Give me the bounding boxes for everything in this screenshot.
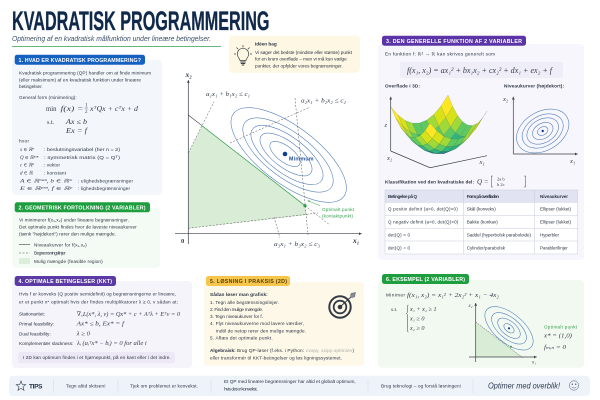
- kkt conditions: Komplementær slackness:: [19, 341, 73, 346]
- kkt conditions: Stationaritet:: [19, 312, 45, 317]
- tips bar: [9, 376, 590, 396]
- panel: 1 hvad er kvadratisk programmering: [12, 55, 162, 195]
- algebraic note: ): [352, 348, 354, 353]
- tip 3: hvis det er konvekst.: [224, 386, 258, 392]
- table: classification: Saddel (hyperbolsk paraboloide): [467, 233, 532, 238]
- mini chart: x₁: [531, 360, 536, 366]
- tip 3: [224, 379, 356, 392]
- text block 4: Hvis f er konveks (Q positiv semidefinit) og begrænsningerne er lineære,: [19, 292, 176, 297]
- axes: [175, 70, 362, 245]
- legend: Begrænsningslinjer: [34, 251, 66, 256]
- formula: general form: 1: [85, 104, 88, 108]
- axes: 0: [181, 238, 184, 245]
- definitions list: Q ∈ ℝⁿˣⁿ: [20, 155, 39, 161]
- formula box: f(x₁, x₂) = ax₁² + bx₁x₂ + cx₂² + dx₁ + ex₂ + f: [407, 66, 554, 75]
- panel: 4 optimale betingelser: [12, 276, 192, 368]
- icon: target with arrow: [329, 292, 356, 318]
- kkt conditions: [19, 311, 180, 347]
- optimal point: Optimalt punkt: [322, 207, 355, 212]
- chart: 3d surface: x₂: [386, 155, 393, 162]
- formula: general form: 2: [85, 110, 88, 115]
- constraint labels: a₁x₁ + b₁x₂ ≤ c₁: [206, 91, 250, 98]
- formula: general form: xᵀQx + cᵀx + d: [89, 106, 139, 113]
- table: classification: det(Q) = 0: [388, 245, 410, 250]
- steps: 5. Aflæs det optimale punkt.: [210, 335, 273, 340]
- icon: smiley: [569, 381, 579, 390]
- text block 2: Vi minimerer f(x₁,x₂) under lineære begrænsninger.: [19, 218, 129, 223]
- legend: Niveaukurver for f(x₁,x₂): [34, 242, 87, 247]
- formula box: [400, 62, 563, 78]
- tip 3: Et QP med lineære begrænsninger har altid et globalt optimum,: [224, 379, 356, 384]
- subtitle: Optimering af en kvadratisk målfunktion under lineære betingelser.: [12, 35, 211, 43]
- constraints: [391, 305, 437, 332]
- panel: 3 den generelle funktion: [378, 36, 584, 260]
- definitions list: E ∈ ℝᵖˣⁿ, f ∈ ℝᵖ: [18, 186, 73, 192]
- text block 4: er et punkt x* optimalt hvis der findes multiplikatorer λ ≥ 0, ν sådan at:: [19, 299, 178, 305]
- definitions list: hvor: [19, 139, 29, 144]
- heading 4: 4. OPTIMALE BETINGELSER (KKT): [18, 279, 112, 285]
- callout text: punkter, der opfylder vores begrænsninger.: [255, 63, 343, 68]
- chart: contour plot: [502, 96, 578, 165]
- callout text: Vi søger det bedste (mindste eller største) punkt: [255, 50, 353, 55]
- legend: Mulig mængde (feasible region): [34, 259, 103, 264]
- steps: 1. Tegn alle begrænsningslinjer.: [210, 300, 279, 305]
- axes: x₂: [184, 70, 192, 79]
- title: KVADRATISK PROGRAMMERING: [12, 6, 270, 36]
- constraint labels: [206, 91, 347, 248]
- icon: light bulb: [234, 45, 252, 65]
- definitions list: x ∈ ℝⁿ: [19, 147, 34, 153]
- classification heading: Q =: [477, 178, 489, 186]
- algebraic note: eller transformér til KKT-betingelser og løs ligningssystemet.: [210, 355, 342, 360]
- algebraic note: Brug QP-løser (f.eks. i Python:: [237, 348, 304, 353]
- tip 1: Tegn altid skitsen!: [66, 384, 106, 389]
- definitions list: : ulighedsbegrænsninger: [78, 178, 133, 183]
- table: classification: Betingelse på Q: [388, 193, 417, 199]
- table: classification: Ellipser (lukket): [540, 207, 572, 212]
- heading 6: 6. EKSEMPEL (2 VARIABLER): [386, 277, 465, 283]
- main chart: feasible region and level curves: [175, 70, 362, 248]
- result: Optimalt punkt: [544, 324, 578, 329]
- heading 5: 5. LØSNING I PRAKSIS (2D): [210, 279, 287, 285]
- kkt conditions: λᵢ (aᵢᵀx* − bᵢ) = 0 for alle i: [76, 340, 147, 347]
- panel: 5 løsning i praksis: [204, 276, 364, 366]
- table: classification: Q negativ definit (a<0, det(Q)>0): [388, 220, 459, 225]
- formula: general form: [46, 104, 139, 135]
- table: classification: Form på overfladen: [467, 193, 499, 199]
- note box: [18, 352, 175, 363]
- algebraic note: Algebraisk:: [210, 348, 236, 353]
- table: classification: det(Q) < 0: [388, 233, 410, 238]
- objective: Minimer: [386, 293, 405, 298]
- classification heading: b 2c: [497, 182, 505, 187]
- steps: indtil de netop rører den mulige mængde.: [216, 328, 306, 333]
- minimum point: Minimum: [289, 156, 314, 162]
- table: classification: Ellipser (lukket): [540, 220, 572, 225]
- tips label: TIPS: [29, 383, 43, 390]
- legend: [19, 242, 103, 264]
- intro text 3: En funktion f: ℝ² → ℝ kan skrives generelt som: [385, 52, 495, 57]
- objective: f(x₁, x₂) = x₁² + 2x₂² + x₁ − 4x₂: [407, 292, 500, 299]
- constraints: x₁ ≥ 0: [409, 316, 425, 322]
- steps: Sådan løser man grafisk:: [210, 291, 268, 297]
- steps: 2. Find den mulige mængde.: [210, 307, 263, 312]
- heading 2: 2. GEOMETRISK FORTOLKNING (2 VARIABLER): [18, 205, 146, 211]
- label: niveaukurver: Niveaukurver (højdekort):: [504, 84, 564, 89]
- feasible region: [188, 126, 307, 228]
- callout text: for en krum overflade – men vi må kun vælge: [255, 55, 347, 61]
- constraint lines: [188, 98, 329, 238]
- classification heading: 2a b: [497, 176, 505, 182]
- result: [543, 324, 578, 351]
- callout text: Idéen bag: [255, 41, 277, 46]
- chart: contour plot: x₂: [502, 96, 509, 103]
- tip 2: Tjek om problemet er konvekst.: [130, 384, 198, 389]
- kkt conditions: λ ≥ 0: [76, 332, 90, 338]
- note box: I 2D kan optimum findes i et hjørnepunkt, på en kant eller i det indre.: [23, 354, 171, 360]
- algebraic note: [210, 348, 354, 360]
- constraints: x₂ ≥ 0: [409, 325, 425, 332]
- heading 3: 3. DEN GENERELLE FUNKTION AF 2 VARIABLER: [386, 39, 522, 45]
- intro text: General form (minimering):: [19, 95, 77, 100]
- kkt conditions: Dual feasibility:: [19, 331, 51, 336]
- table: classification: Parabler/linjer: [540, 245, 568, 250]
- text block 2: [19, 218, 137, 237]
- formula: general form: s.t.: [47, 120, 55, 126]
- closing phrase: Optimer med overblik!: [488, 382, 561, 390]
- definitions list: : symmetrisk matrix (Q = Qᵀ): [44, 155, 121, 160]
- table: classification: Hyperbler: [540, 233, 560, 238]
- steps: 3. Tegn niveaukurver for f.: [210, 314, 263, 319]
- result: x* = (1,0): [543, 332, 572, 340]
- chart: 3d surface: [384, 95, 487, 168]
- steps: 4. Flyt niveaukurverne mod lavere værdier,: [210, 321, 304, 326]
- callout text: [255, 41, 353, 68]
- definitions list: c ∈ ℝⁿ: [20, 162, 34, 168]
- chart: 3d surface: z: [384, 122, 388, 129]
- panel: 6 eksempel: [378, 274, 584, 368]
- steps: [210, 291, 306, 340]
- constraints: x₁ + x₂ ≥ 1: [409, 306, 437, 313]
- table: classification: Skål (konveks): [467, 206, 496, 212]
- definitions list: : beslutningsvariabel (her n = 2): [44, 147, 121, 152]
- optimal point: (kontaktpunkt): [322, 213, 353, 218]
- definitions list: [18, 139, 133, 192]
- axes: x₁: [352, 236, 359, 245]
- table: classification: Cylinder/parabolsk: [467, 245, 506, 250]
- constraints: s.t.: [391, 307, 398, 313]
- level curves: [216, 91, 361, 219]
- minimum point: [283, 152, 314, 162]
- intro text: betingelser.: [19, 84, 43, 89]
- kkt conditions: ∇ₓL(x*, λ, ν) = Qx* + c + Aᵀλ + Eᵀν = 0: [77, 311, 180, 318]
- chart: contour plot: x₁: [569, 158, 575, 165]
- optimal point: [303, 201, 355, 218]
- table: classification: Bakke (konkav): [467, 220, 498, 225]
- definitions list: : vektor: [44, 162, 60, 167]
- kkt conditions: Ax* ≤ b, Ex* = f: [76, 320, 126, 328]
- intro text: (eller maksimum) af en kvadratisk funktion under lineære: [19, 78, 141, 83]
- definitions list: : lighedsbegrænsninger: [78, 186, 130, 191]
- formula: general form: min: [46, 106, 57, 113]
- text block 2: (tænk "højdekort") rører den mulige mængde.: [19, 232, 116, 237]
- label: overflade: Overflade i 3D:: [385, 84, 420, 89]
- classification heading: [385, 176, 526, 187]
- text block 4: [19, 292, 178, 305]
- formula: general form: Ax ≤ b: [65, 119, 88, 126]
- kkt conditions: Primal feasibility:: [19, 321, 54, 326]
- result: fₘᵢₙ = 0: [544, 344, 567, 351]
- definitions list: d ∈ ℝ: [20, 170, 34, 176]
- table: classification: Q positiv definit (a>0, det(Q)>0): [388, 207, 458, 212]
- icon: star: [16, 381, 26, 390]
- algebraic note: cvxpy, scipy.optimize: [306, 348, 352, 353]
- constraint labels: a₃x₁ + b₃x₂ ≤ c₃: [274, 241, 320, 248]
- table: classification: [385, 190, 578, 254]
- mini chart: x₂: [468, 304, 473, 309]
- mini chart: [468, 299, 541, 366]
- table: classification: Niveaukurver: [540, 194, 568, 199]
- constraint labels: a₂x₁ + b₂x₂ ≤ c₂: [301, 98, 347, 104]
- formula: general form: f(x) =: [60, 106, 84, 113]
- classification heading: Klassifikation ved den kvadratiske del:: [385, 179, 474, 184]
- tip 4: Brug teknologi – og forstå løsningen!: [381, 383, 461, 389]
- formula: general form: Ex = f: [65, 128, 88, 135]
- intro text: Kvadratisk programmering (QP) handler om at finde minimum: [19, 70, 151, 75]
- callout: idéen bag: [229, 36, 360, 73]
- panel: 2 geometrisk fortolkning: [12, 202, 160, 268]
- text block 2: Det optimale punkt findes hvor de laveste niveaukurver: [19, 225, 137, 230]
- definitions list: : konstant: [44, 170, 67, 175]
- definitions list: A ∈ ℝᵐˣⁿ, b ∈ ℝᵐ: [19, 178, 73, 184]
- intro text: [19, 70, 151, 100]
- chart: 3d surface: x₁: [478, 159, 485, 166]
- heading 1: 1. HVAD ER KVADRATISK PROGRAMMERING?: [18, 58, 141, 64]
